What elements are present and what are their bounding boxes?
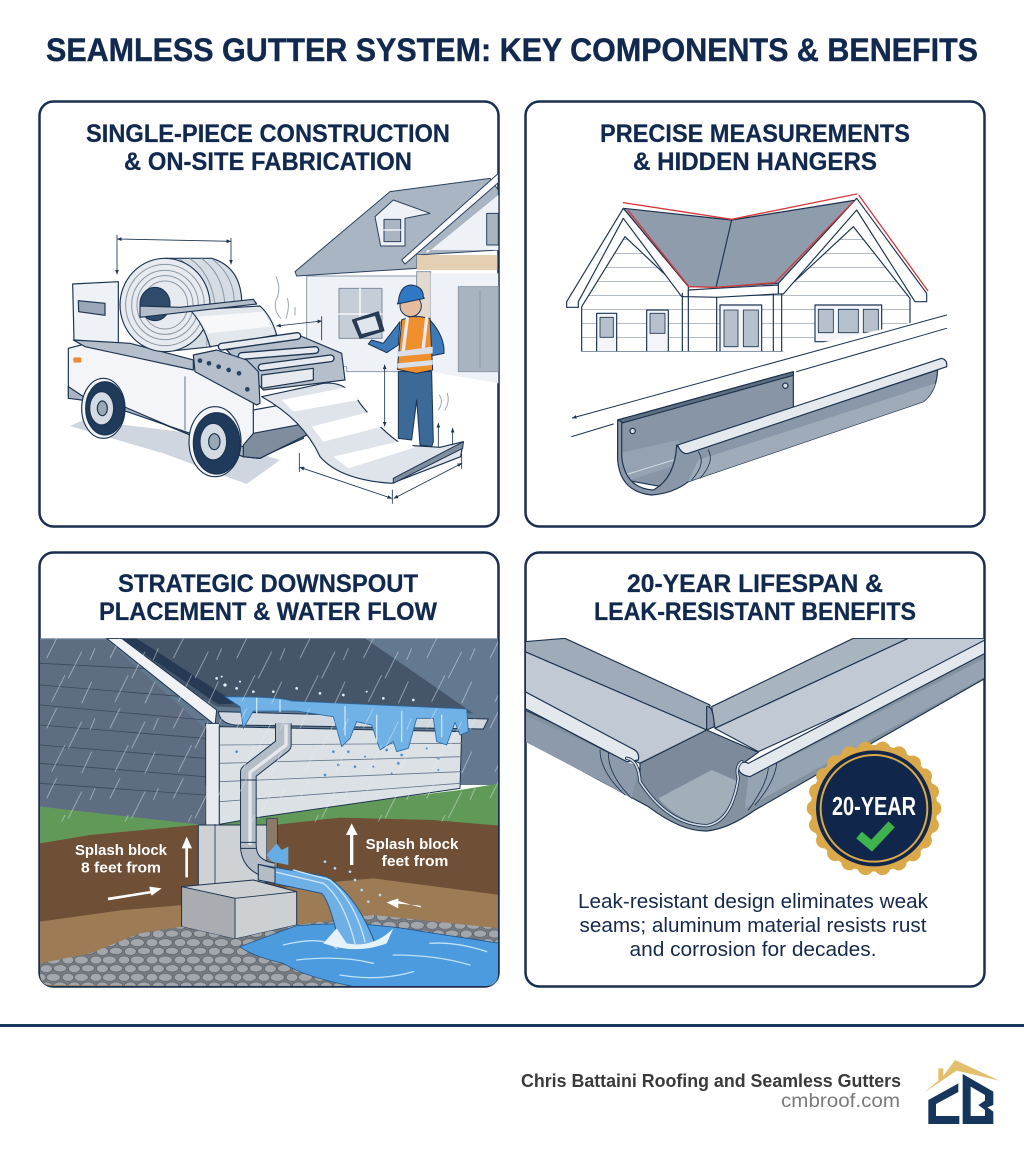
panel: precise measurements [526, 102, 984, 526]
footer: company name and website: Chris Battaini Roofing and Seamless Gutters [521, 1071, 901, 1091]
downspout [248, 723, 283, 871]
heading: precise measurements: & HIDDEN HANGERS [633, 148, 877, 176]
heading: single-piece construction: & ON-SITE FABRICATION [124, 148, 412, 176]
sky [40, 638, 500, 785]
splash droplets [324, 860, 381, 903]
foundation [198, 824, 270, 885]
illustration: seamless gutter corner [525, 638, 985, 831]
gutter [218, 712, 488, 729]
icon: flat sheet [262, 383, 463, 483]
illustration: rainwater flow [40, 638, 500, 988]
illustration: truck fabricating gutter on site [68, 173, 498, 503]
discharge water [258, 864, 375, 947]
icon: house [295, 173, 498, 383]
rain [40, 638, 500, 822]
splash on roof [215, 676, 415, 701]
heading: single-piece construction: SINGLE-PIECE CONSTRUCTION [86, 120, 450, 148]
interior cup [640, 730, 758, 825]
panel: lifespan and leak-resistant benefits [525, 552, 985, 986]
droplets on wall [235, 747, 440, 776]
callout: left splash block: 8 feet from [81, 861, 161, 877]
badge: 20-year: 20-YEAR [832, 791, 916, 821]
gutter overflow water [225, 697, 468, 752]
water pool [240, 924, 500, 988]
icon: worker [352, 285, 444, 447]
panel: strategic downspout placement [40, 552, 500, 988]
left wall [40, 640, 205, 825]
icon: house with measured roof [567, 198, 927, 352]
callout: left splash block: Splash block [75, 843, 168, 859]
heading: strategic downspout placement: STRATEGIC DOWNSPOUT [118, 570, 418, 598]
callout: right splash block: Splash block [366, 837, 459, 853]
panel: single-piece construction [40, 102, 498, 526]
heading: strategic downspout placement: PLACEMENT & WATER FLOW [99, 598, 437, 626]
callout: left splash block [76, 844, 167, 872]
roof [107, 638, 473, 715]
heading: lifespan and leak-resistant: 20-YEAR LIFESPAN & [627, 570, 883, 598]
callout: right splash block [366, 838, 458, 866]
icon: rollers [193, 335, 345, 405]
gravel [40, 915, 500, 988]
red measurement lines [623, 194, 928, 291]
text block: benefits description: seams; aluminum material resists rust [580, 915, 927, 937]
logo: CB house [924, 1060, 999, 1124]
footer divider [0, 1024, 1024, 1027]
footer: company name and website [521, 1071, 901, 1112]
icon: truck [68, 282, 307, 477]
text block: benefits description: and corrosion for decades. [630, 939, 876, 961]
rear channels [525, 638, 710, 730]
gutter hull [525, 648, 985, 831]
ground shadow [70, 420, 280, 484]
direction lines [572, 315, 947, 437]
arrows [108, 823, 421, 908]
heading: precise measurements: PRECISE MEASUREMENTS [600, 120, 910, 148]
siding wall [206, 723, 219, 825]
callout: right splash block: feet from [382, 854, 448, 870]
icon: aluminum coil [120, 258, 277, 352]
icon: gutter with hidden hanger [618, 358, 947, 495]
text block: benefits description: Leak-resistant design eliminates weak [578, 891, 929, 913]
grass and soil [40, 783, 500, 988]
illustration: house and gutter [565, 194, 947, 495]
front lips [525, 692, 639, 762]
heat wisps [275, 277, 448, 410]
footer: company name and website: cmbroof.com [781, 1091, 900, 1112]
badge: 20-year [811, 745, 937, 872]
heading: lifespan and leak-resistant: LEAK-RESISTANT BENEFITS [594, 598, 916, 626]
dimension lines [117, 235, 462, 503]
title: SEAMLESS GUTTER SYSTEM: KEY COMPONENTS & BENEFITS [46, 32, 978, 68]
